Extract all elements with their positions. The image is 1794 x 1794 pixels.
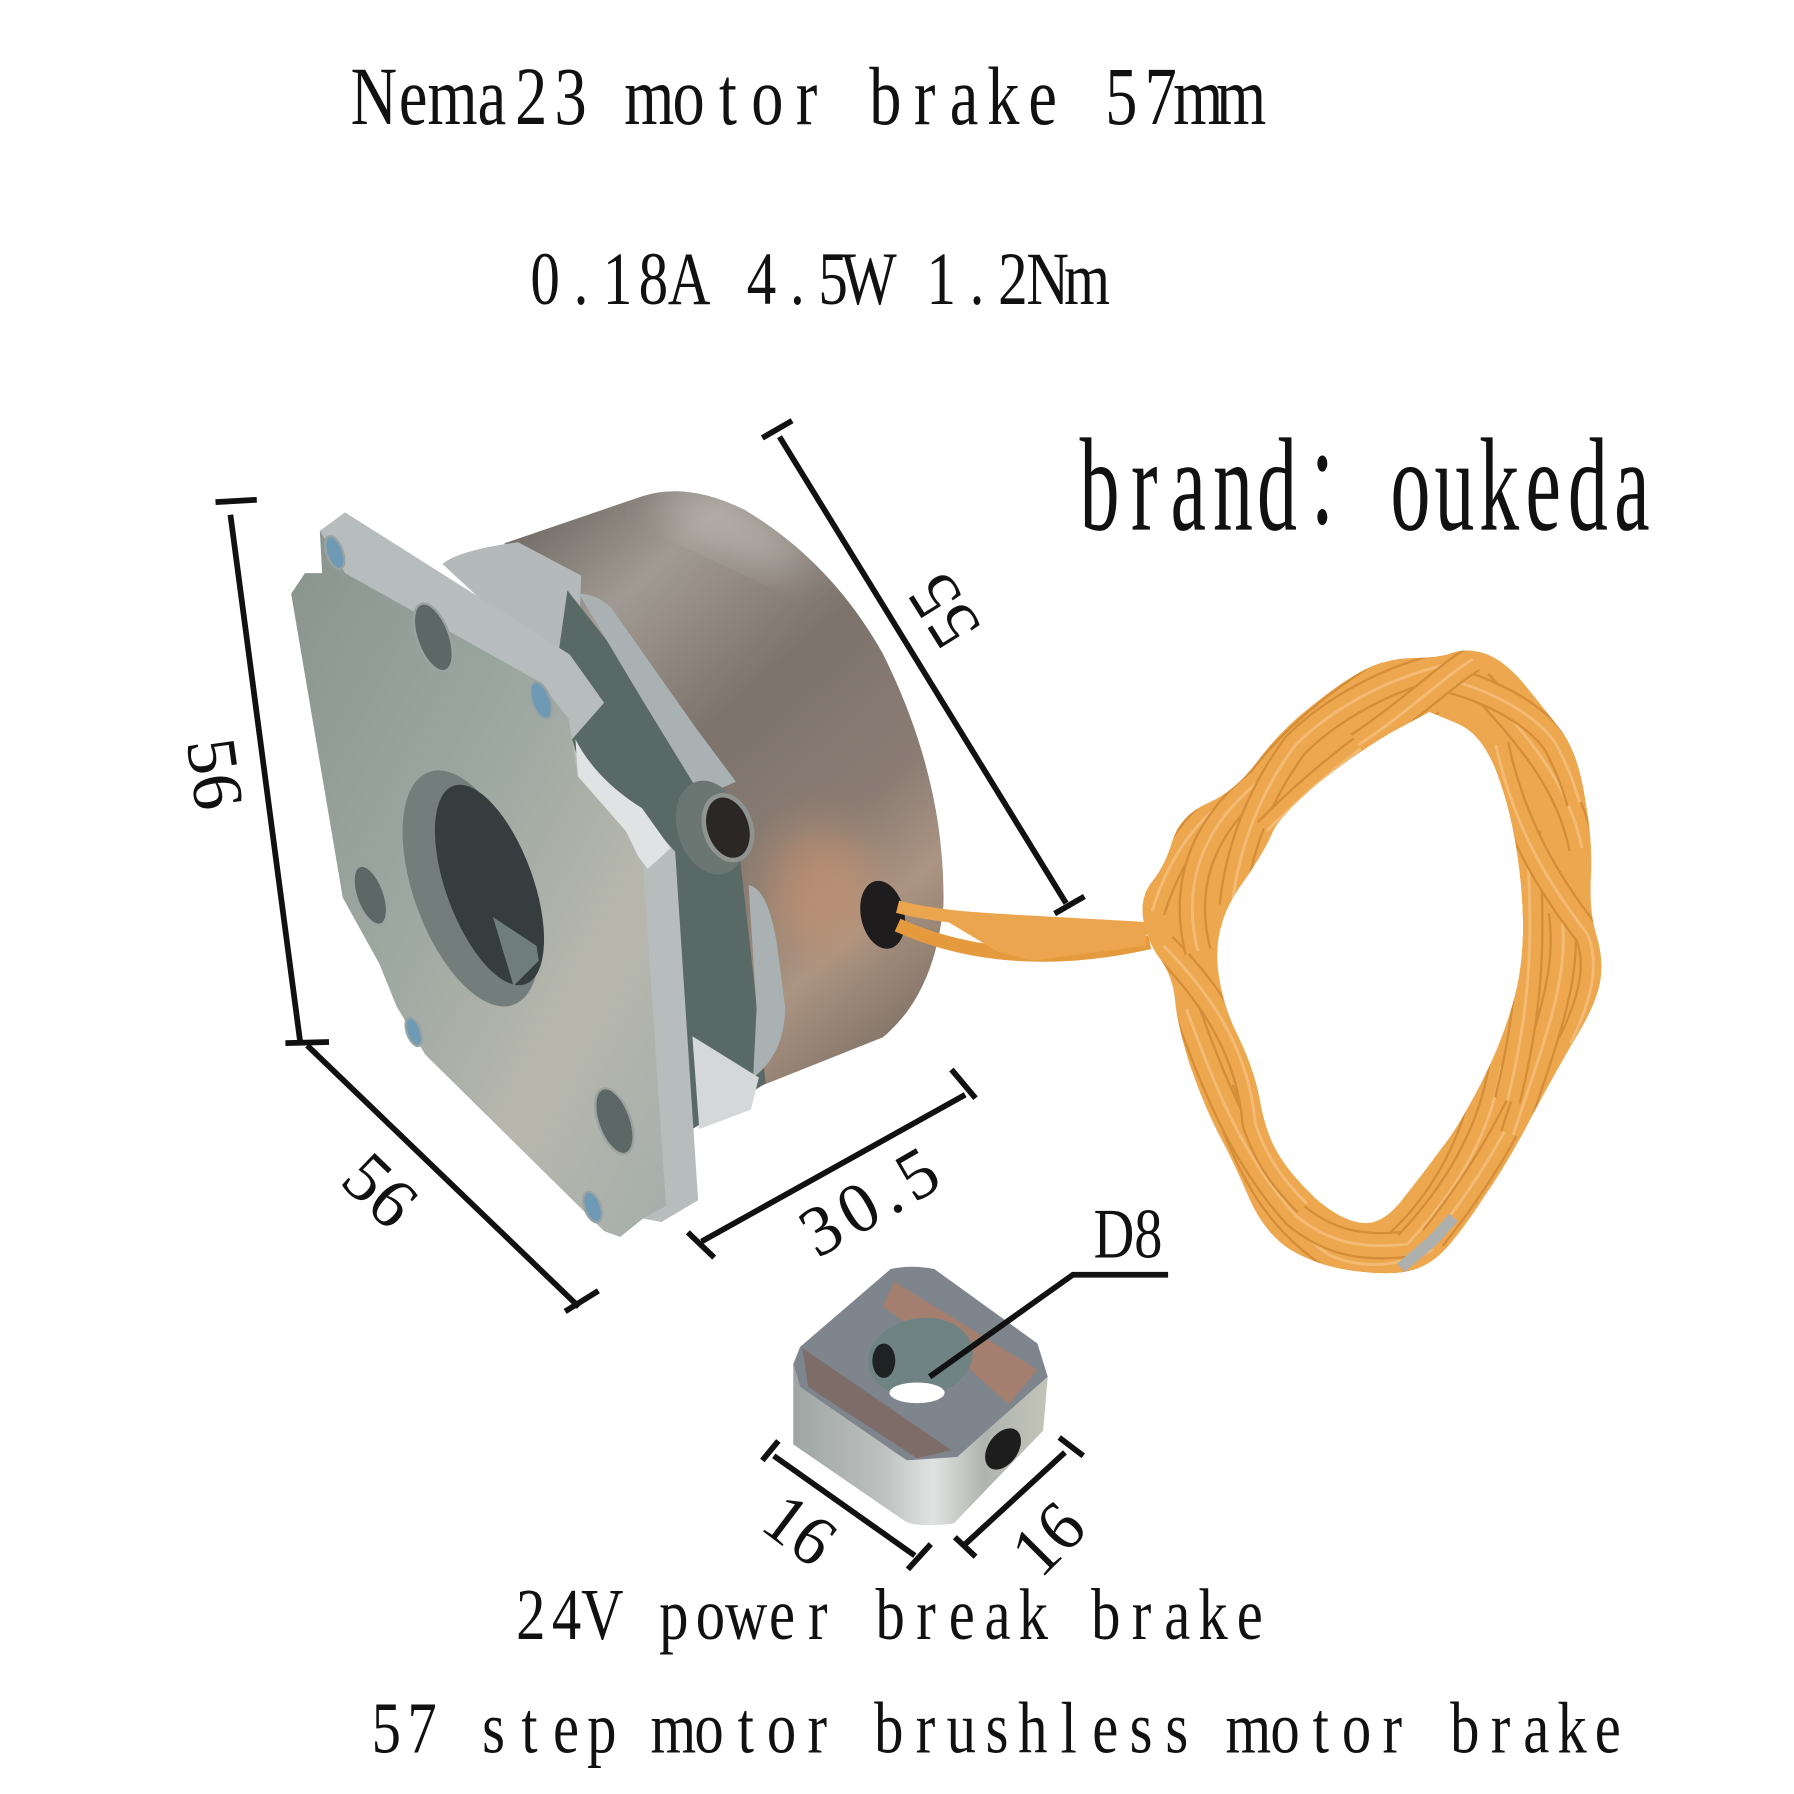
set screw boss: [664, 772, 757, 884]
dimension left: 56: [171, 500, 329, 1043]
exposed braided shield: [1401, 1217, 1454, 1268]
centre bore: [375, 752, 567, 1024]
dimension upper right: 55: [762, 421, 1084, 914]
specifications line: 0.18A 4.5W 1.2Nm: [530, 237, 1110, 321]
collar dimension right: 16: 16: [997, 1487, 1100, 1591]
through hole opening: [890, 1382, 945, 1403]
dimension left: 56: 56: [171, 733, 258, 815]
bore: [862, 1310, 979, 1405]
infographic canvas: [188, 66, 1649, 1768]
cable loop base: [1143, 651, 1601, 1273]
mounting plate front face: [291, 531, 666, 1237]
dimension upper right: 55: 55: [892, 560, 996, 661]
collar top face: [793, 1267, 1048, 1460]
internal set screw: [872, 1343, 895, 1378]
motor brake photo illustration: [291, 479, 944, 1237]
twisted orange cable: [898, 651, 1601, 1273]
dimension lower left: 56: [307, 1045, 598, 1311]
set screw socket: [696, 789, 760, 866]
lower bracket piece: [692, 1036, 759, 1129]
cable grommet: [854, 877, 911, 953]
D8 callout: D8: [1094, 1196, 1162, 1274]
inner flange: [579, 594, 785, 1078]
collar dimension right: 16: [955, 1437, 1100, 1591]
top bracket piece: [442, 542, 581, 653]
dimension lower left: 56: 56: [327, 1138, 432, 1243]
dimension depth: 30.5: 30.5: [786, 1132, 952, 1273]
dimension depth: 30.5: [688, 1070, 976, 1273]
brand label: brand：oukeda: [1080, 411, 1650, 559]
collar side faces: [793, 1364, 1048, 1525]
side set screw: [978, 1422, 1028, 1476]
dark inner recess: [550, 590, 766, 1129]
rust band lower: [802, 1348, 951, 1458]
D8 callout: [930, 1196, 1168, 1377]
cable strands: [1152, 659, 1593, 1265]
brake cylinder body: [504, 479, 944, 1087]
shaft collar: [793, 1267, 1048, 1525]
rust band upper: [883, 1282, 1037, 1404]
mounting holes: [321, 534, 641, 1225]
mounting plate lobe highlight: [575, 739, 671, 869]
collar dimension left: 16: 16: [749, 1478, 850, 1582]
title: Nema23 motor brake 57mm: [351, 51, 1266, 143]
caption line one: 24V power break brake: [516, 1575, 1263, 1656]
collar dimension left: 16: [749, 1441, 931, 1582]
mounting plate thick edge: [320, 512, 698, 1222]
caption line two: 57 step motor brushless motor brake: [372, 1689, 1621, 1769]
cable lead from grommet: [898, 907, 1150, 961]
